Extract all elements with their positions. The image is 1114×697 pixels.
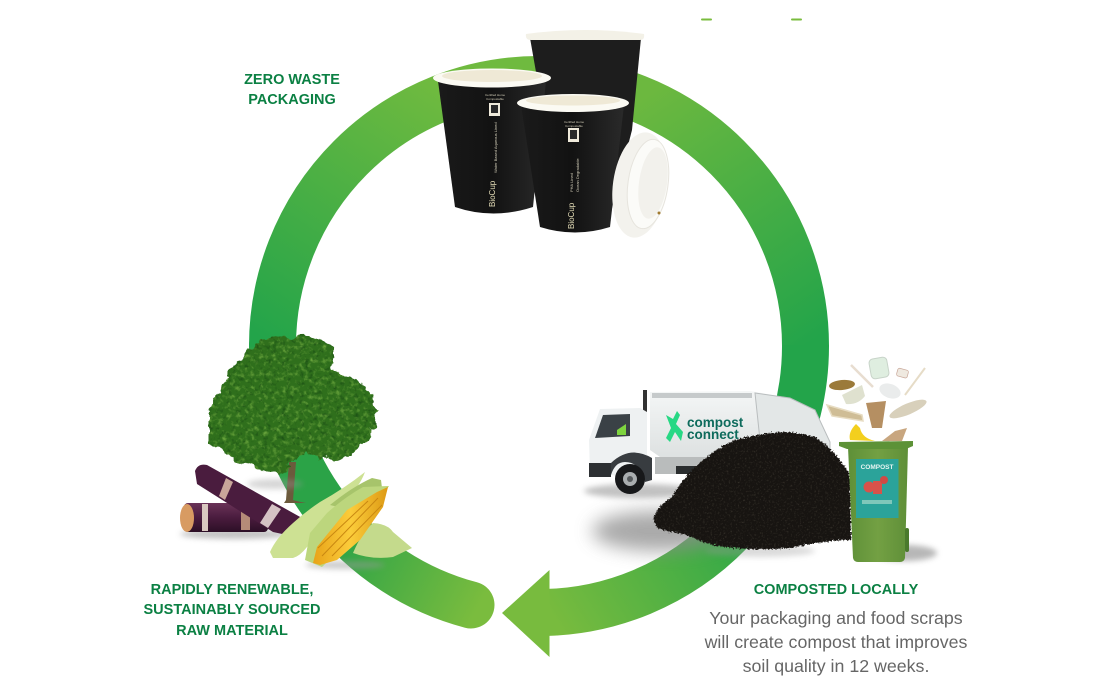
arrowhead	[502, 570, 550, 657]
text: compost description: soil quality in 12 weeks.	[743, 656, 929, 676]
scrap: straw	[905, 368, 925, 395]
image: corn	[270, 472, 412, 569]
heading: composted locally: COMPOSTED LOCALLY	[754, 582, 919, 598]
heading: rapidly renewable raw material: RAW MATERIAL	[176, 623, 288, 639]
scrap: clear cup	[868, 357, 890, 379]
cup: front: PHA Lined	[569, 173, 574, 192]
scrap: food slice	[829, 379, 855, 391]
stray green marks at top	[701, 18, 802, 20]
cup: front: BioCup	[567, 202, 576, 229]
cup: back tall	[526, 30, 644, 208]
scrap: long tray	[887, 396, 929, 422]
bin label: COMPOST	[861, 464, 893, 471]
corn: yellow cob	[313, 487, 388, 565]
image: garbage truck	[584, 390, 830, 498]
cup: left: Certified Home	[485, 93, 505, 97]
scrap: tray	[827, 405, 863, 421]
scrap: stirrer	[851, 365, 873, 387]
text: compost description: will create compost that improves	[704, 632, 968, 652]
truck cab	[589, 408, 652, 483]
cup: front: Certified Home	[564, 120, 584, 124]
compost pile shadow	[592, 511, 728, 551]
heading: zero waste packaging: PACKAGING	[248, 92, 336, 108]
scrap: banana	[850, 424, 875, 441]
corn: husk tip	[330, 478, 382, 510]
heading: zero waste packaging: ZERO WASTE	[244, 72, 340, 88]
cane: upper stalk	[195, 465, 302, 535]
cane shadow	[180, 529, 290, 539]
heading: rapidly renewable raw material: RAPIDLY RENEWABLE,	[151, 582, 313, 598]
corn: left husk	[270, 472, 365, 558]
truck logo: compost	[687, 415, 744, 430]
image: food and packaging scraps	[827, 357, 929, 441]
arc: raw material to packaging upper	[272, 80, 539, 347]
truck body	[650, 391, 830, 470]
bin shadow	[873, 545, 937, 561]
cup: left: Water Based Aqueous Lined	[493, 122, 498, 173]
text: compost description: Your packaging and food scraps	[709, 608, 963, 628]
cup lid	[606, 129, 674, 241]
image: tree	[208, 335, 379, 503]
cup: front: Compostable	[565, 124, 583, 128]
cup: front	[517, 94, 629, 232]
cane: lower stalk	[180, 503, 268, 532]
image: paper cups and lid	[433, 30, 674, 241]
image: sugar cane	[180, 465, 303, 539]
cup: front: Ocean Degradable	[575, 158, 580, 192]
cup: left: Compostable	[486, 97, 504, 101]
arc: raw material to packaging lower	[272, 346, 471, 605]
arc: packaging to compost upper	[539, 80, 806, 346]
truck shadow	[584, 484, 696, 498]
corn shadow	[305, 561, 385, 569]
scrap: cardboard sleeve	[882, 428, 907, 441]
tree trunk	[284, 462, 306, 503]
scrap: coffee cup	[866, 401, 886, 428]
image: green compost bin	[839, 441, 913, 562]
circular arrow ring	[272, 80, 806, 657]
truck logo	[666, 411, 744, 442]
heading: rapidly renewable raw material: SUSTAINABLY SOURCED	[144, 602, 320, 618]
cane: stalk bands	[219, 478, 281, 528]
scrap: small tub	[896, 368, 909, 378]
cup: left	[433, 68, 551, 214]
corn: husk wrap	[305, 486, 389, 567]
truck logo: connect	[687, 427, 739, 442]
tree canopy	[208, 335, 379, 476]
image: compost pile	[654, 432, 851, 549]
truck wheel	[615, 464, 645, 494]
arc: packaging to compost lower	[545, 345, 806, 612]
scrap: bowl	[842, 385, 865, 404]
cup: left: BioCup	[488, 180, 497, 207]
corn: back husk	[353, 523, 412, 558]
scrap: lid	[877, 381, 903, 401]
